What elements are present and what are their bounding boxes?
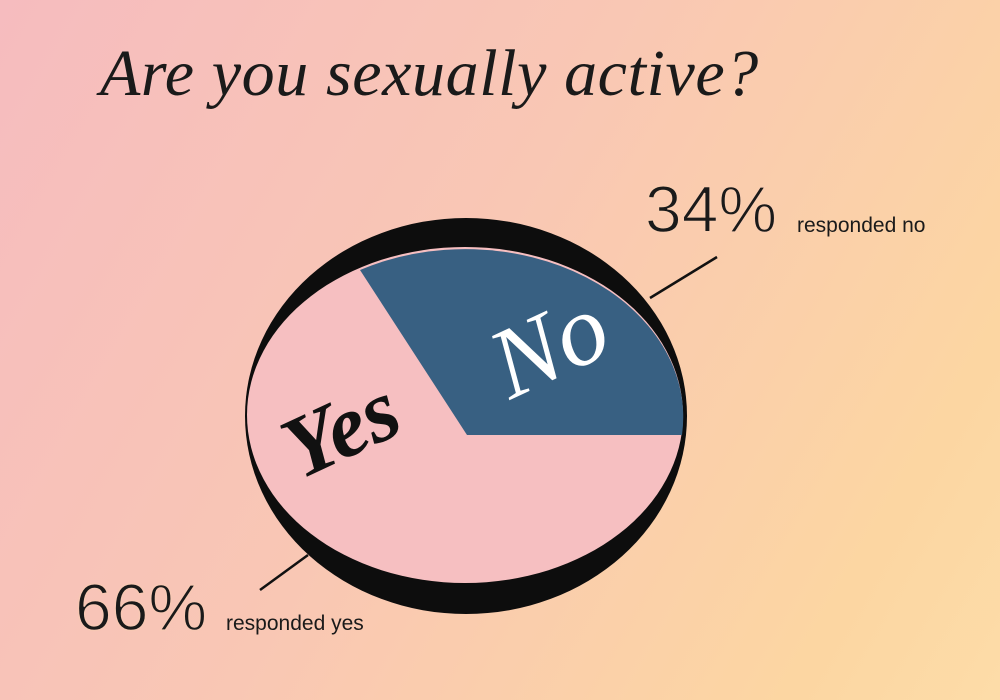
callout: 66% yes bbox=[75, 570, 364, 644]
pie slice: no bbox=[360, 249, 683, 435]
label: Yes: Yes bbox=[267, 361, 415, 498]
label: No: No bbox=[471, 270, 625, 420]
pie outer rim bbox=[245, 218, 687, 614]
callout: 34% no bbox=[645, 172, 925, 246]
callout: 34% no: responded no bbox=[797, 214, 925, 237]
leader line: no bbox=[650, 257, 717, 298]
callout: 66% yes: responded yes bbox=[226, 612, 364, 635]
callout: 66% yes: 66% bbox=[75, 570, 207, 644]
pie slice: yes bbox=[247, 247, 683, 583]
title: Are you sexually active? bbox=[100, 37, 759, 110]
callout: 34% no: 34% bbox=[645, 172, 777, 246]
leader line: yes bbox=[260, 555, 308, 590]
